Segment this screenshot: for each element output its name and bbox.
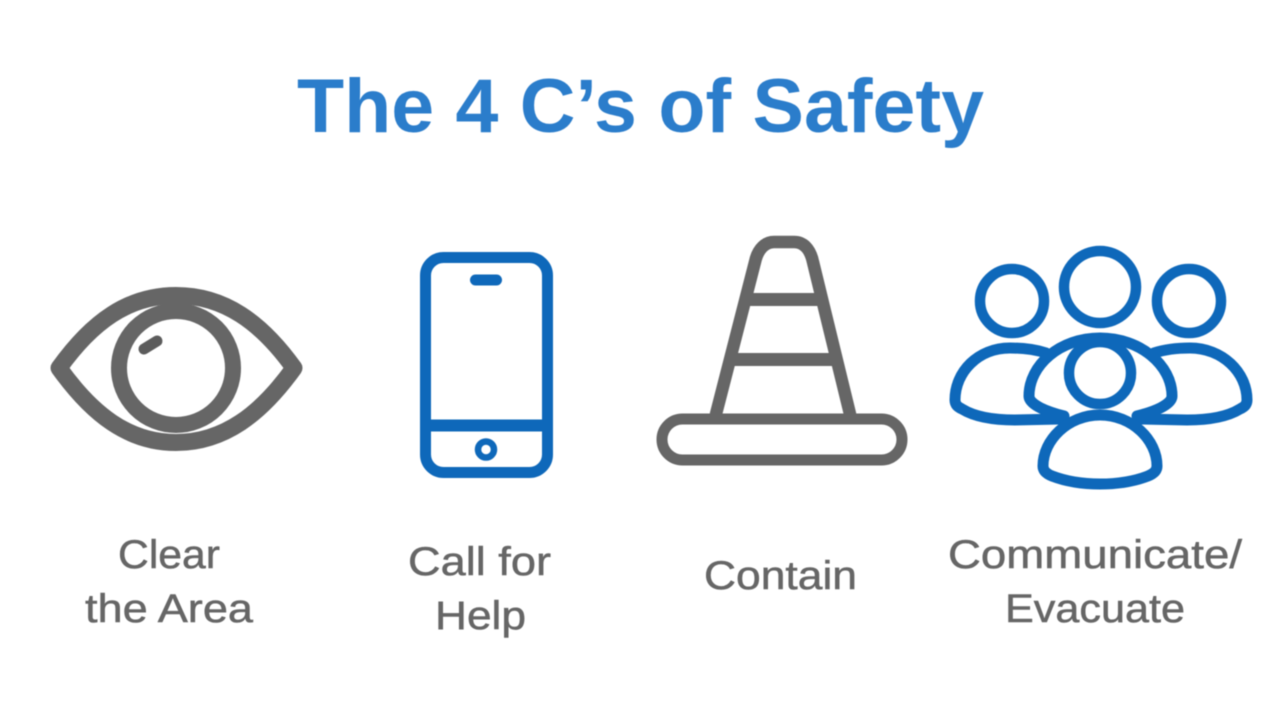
icon: group of people [955,251,1247,484]
label: clear the area: the Area [85,587,254,631]
title: The 4 C’s of Safety [297,64,984,149]
label: call for help: Call for [408,540,551,584]
label: clear the area [85,533,254,631]
label: clear the area: Clear [118,533,220,577]
label: call for help [408,540,551,638]
label: communicate / evacuate: Communicate/ [948,533,1243,577]
label: communicate / evacuate [948,533,1243,631]
label: communicate / evacuate: Evacuate [1005,587,1185,631]
icon: traffic cone [662,242,902,460]
icon: eye [59,296,294,442]
label: call for help: Help [435,594,526,638]
icon: mobile phone [426,258,548,472]
label: contain: Contain [704,554,857,598]
